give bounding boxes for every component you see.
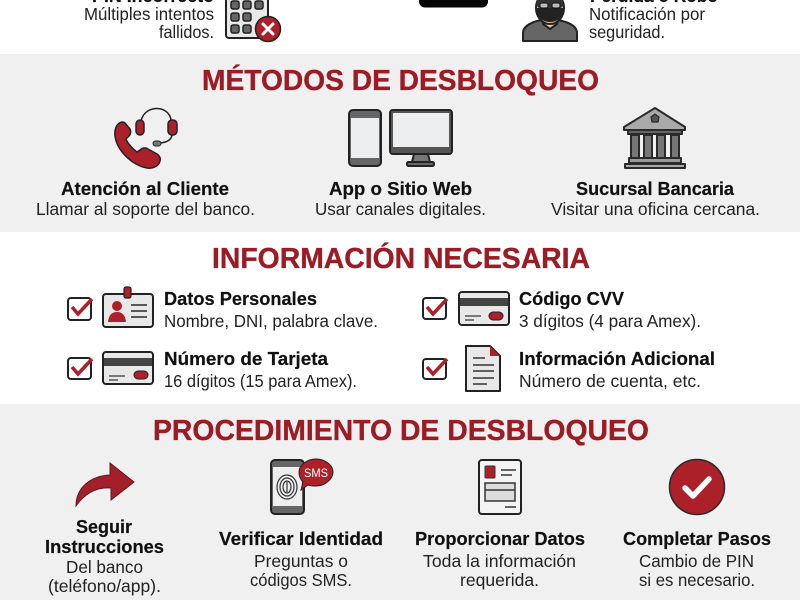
check: código cvv: [423, 298, 447, 319]
heading: métodos: MÉTODOS DE DESBLOQUEO: [202, 63, 599, 97]
text: datos personales: [164, 288, 378, 331]
text: datos personales: Nombre, DNI, palabra clave.: [164, 311, 378, 331]
icon: document: [466, 346, 500, 391]
text: código cvv: [519, 288, 701, 331]
icon: phone with fingerprint and SMS: [271, 459, 333, 514]
text: seguir instrucciones: (teléfono/app).: [48, 576, 161, 596]
text: información adicional: [519, 348, 715, 391]
icon: check circle: [670, 460, 724, 514]
icon: card cvv: [459, 292, 509, 325]
text: seguir instrucciones: Seguir: [76, 516, 132, 537]
text: código cvv: 3 dígitos (4 para Amex).: [519, 311, 701, 331]
text: sucursal bancaria: Visitar una oficina cercana.: [551, 199, 760, 219]
text: número de tarjeta: [164, 348, 357, 391]
heading: procedimiento: PROCEDIMIENTO DE DESBLOQUEO: [153, 415, 649, 447]
text: perdida o robo: Notificación por: [589, 4, 705, 24]
text: verificar identidad: códigos SMS.: [250, 570, 352, 590]
text: atención al cliente: Llamar al soporte del banco.: [36, 199, 255, 219]
icon: phone and monitor: [349, 110, 452, 166]
icon: phone with fingerprint and SMS: SMS: [304, 468, 328, 480]
text: seguir instrucciones: [45, 516, 164, 596]
text: sucursal bancaria: [551, 178, 760, 219]
text: verificar identidad: [219, 528, 383, 590]
text: proporcionar datos: [415, 528, 585, 590]
check: datos personales: [68, 298, 92, 320]
text: PIN incorrecto: Múltiples intentos: [84, 4, 214, 24]
text: número de tarjeta: Número de Tarjeta: [164, 348, 329, 369]
text: atención al cliente: [36, 178, 255, 219]
text: verificar identidad: Verificar Identidad: [219, 528, 383, 549]
text: app o sitio web: [315, 178, 486, 219]
text: número de tarjeta: 16 dígitos (15 para Amex).: [164, 371, 357, 391]
icon: thief: [523, 0, 577, 41]
text: app o sitio web: Usar canales digitales.: [315, 199, 486, 219]
text: perdida o robo: seguridad.: [589, 22, 665, 42]
text: información adicional: Información Adicional: [519, 348, 715, 369]
icon: black device bottom: [419, 0, 488, 8]
check: número de tarjeta: [68, 358, 92, 379]
text: proporcionar datos: requerida.: [460, 570, 539, 590]
text: datos personales: Datos Personales: [164, 288, 317, 309]
panel: procedimiento de desbloqueo: [45, 415, 771, 596]
icon: keypad with error: [226, 0, 280, 42]
icon: id card: [103, 287, 153, 327]
text: proporcionar datos: Toda la información: [423, 551, 576, 571]
check: información adicional: [423, 359, 447, 379]
icon: phone with headset: [115, 108, 177, 168]
text: código cvv: Código CVV: [519, 288, 625, 309]
text: completar pasos: si es necesario.: [639, 570, 755, 590]
panel: métodos de desbloqueo: [36, 63, 760, 219]
panel: top causes: [84, 0, 718, 42]
text: perdida o robo: [589, 0, 718, 42]
text: completar pasos: Completar Pasos: [623, 528, 771, 549]
text: app o sitio web: App o Sitio Web: [329, 178, 472, 199]
heading: información: INFORMACIÓN NECESARIA: [212, 241, 590, 275]
text: información adicional: Número de cuenta, etc.: [519, 371, 701, 391]
icon: curved arrow: [76, 463, 134, 506]
icon: card: [103, 352, 153, 384]
text: PIN incorrecto: fallidos.: [159, 22, 214, 42]
panel: información necesaria: [68, 241, 715, 391]
text: seguir instrucciones: Instrucciones: [45, 536, 164, 557]
text: proporcionar datos: Proporcionar Datos: [415, 528, 585, 549]
text: completar pasos: [623, 528, 771, 590]
text: PIN incorrecto: [84, 0, 214, 42]
text: sucursal bancaria: Sucursal Bancaria: [576, 178, 735, 199]
icon: data form: [479, 460, 521, 514]
text: atención al cliente: Atención al Cliente: [61, 178, 229, 199]
text: verificar identidad: Preguntas o: [254, 551, 348, 571]
text: seguir instrucciones: Del banco: [66, 557, 143, 577]
text: completar pasos: Cambio de PIN: [639, 551, 754, 571]
icon: bank building: [624, 108, 685, 168]
